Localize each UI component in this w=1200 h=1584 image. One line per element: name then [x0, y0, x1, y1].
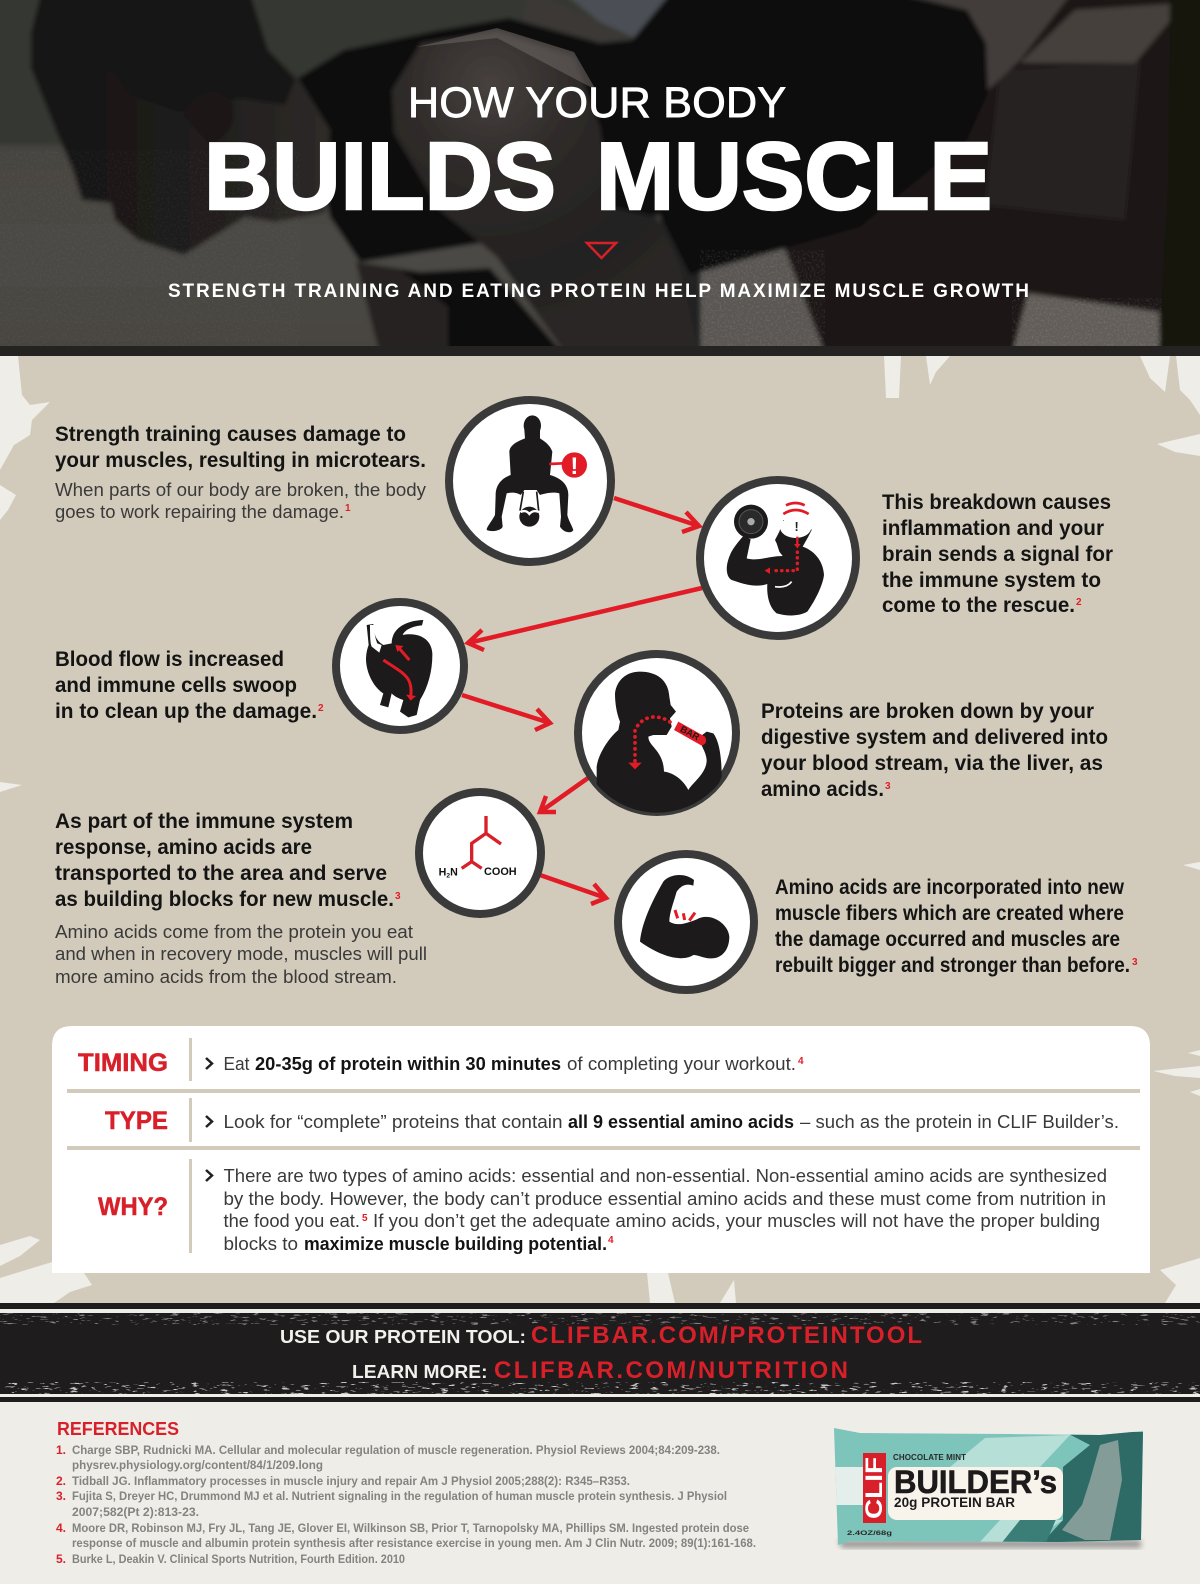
row: type: – such as the protein in CLIF Builder’s. [800, 1111, 1119, 1132]
text block: step 4: Proteins are broken down by your [761, 700, 1094, 723]
row: why: 5 [362, 1213, 368, 1224]
panel: tan paper background [0, 356, 1200, 1313]
references: Charge SBP, Rudnicki MA. Cellular and molecular regulation of muscle regeneration. Physiol Reviews 2004;84:209-238. [72, 1445, 720, 1457]
text block: step 2: brain sends a signal for [882, 543, 1113, 566]
title [204, 79, 992, 230]
row: why: 4 [608, 1235, 614, 1246]
subtitle: STRENGTH TRAINING AND EATING PROTEIN HELP MAXIMIZE MUSCLE GROWTH [168, 281, 1029, 302]
arrow: step 5 to step 6 [540, 875, 606, 904]
icon: squat with kettlebell: ! [570, 453, 578, 480]
icon: person eating protein bar: BAR [679, 724, 701, 742]
references: 5. [56, 1552, 66, 1566]
text block: step 5: transported to the area and serve [55, 862, 387, 885]
row: why: WHY? [98, 1193, 168, 1221]
text block: step 5: more amino acids from the blood stream. [55, 966, 397, 987]
head [31, 54, 333, 256]
text block: step 6: 3 [1132, 957, 1138, 968]
panel: call to action band: CLIFBAR.COM/NUTRITION [494, 1357, 848, 1384]
text block: step 2: 2 [1076, 597, 1082, 608]
row: why: If you don’t get the adequate amino acids, your muscles will not have the proper bulding [373, 1210, 1100, 1231]
icon: flexing arm and brain signal [700, 480, 856, 636]
row: why: maximize muscle building potential. [304, 1233, 607, 1254]
text block: step 5: As part of the immune system [55, 810, 353, 833]
references: 2007;582(Pt 2):813-23. [72, 1507, 199, 1519]
title: HOW YOUR BODY [408, 79, 786, 127]
text block: step 3 [55, 648, 324, 723]
row: why: by the body. However, the body can’t produce essential amino acids and these must come from nutrition in [224, 1188, 1106, 1209]
crate [781, 0, 1173, 346]
references: Tidball JG. Inflammatory processes in muscle injury and repair Am J Physiol 2005;288(2): R345–R353. [72, 1476, 630, 1488]
references: 1. [56, 1443, 66, 1457]
references: 3. [56, 1489, 66, 1503]
references [56, 1419, 756, 1566]
protein bar product: 20g PROTEIN BAR [894, 1495, 1015, 1510]
far arm [363, 257, 560, 346]
text block: step 4: 3 [885, 781, 891, 792]
arm [389, 30, 663, 346]
text block: step 3: 2 [318, 703, 324, 714]
icon: squat with kettlebell [449, 400, 611, 562]
icon: amino acid molecule: COOH [484, 866, 517, 878]
references: response of muscle and albumin protein synthesis after resistance exercise in young men. Am J Clin Nutr. 2009; 89(1):161-168. [72, 1538, 756, 1550]
text block: step 2: This breakdown causes [882, 491, 1111, 514]
panel: call to action band: USE OUR PROTEIN TOOL: [280, 1326, 526, 1347]
text block: step 2 [882, 491, 1113, 617]
thigh [910, 0, 1069, 94]
protein bar product [830, 1425, 1150, 1550]
title: BUILDS [204, 123, 556, 230]
row: timing: 4 [798, 1056, 804, 1067]
text block: step 6 [775, 876, 1138, 977]
row: timing: Eat [224, 1053, 250, 1074]
text block: step 1: goes to work repairing the damage. [55, 501, 344, 522]
text block: step 1: When parts of our body are broken, the body [55, 479, 427, 500]
row: type: all 9 essential amino acids [568, 1111, 794, 1132]
references: physrev.physiology.org/content/84/1/209.long [72, 1460, 323, 1472]
text block: step 3: and immune cells swoop [55, 674, 297, 697]
row: timing [78, 1049, 804, 1077]
text block: step 1: your muscles, resulting in microtears. [55, 449, 426, 472]
text block: step 5: as building blocks for new muscle. [55, 888, 394, 911]
text block: step 5 [55, 810, 427, 987]
arrow: step 4 to step 5 [540, 778, 588, 812]
text block: step 3: in to clean up the damage. [55, 700, 317, 723]
references: Moore DR, Robinson MJ, Fry JL, Tang JE, Glover EI, Wilkinson SB, Prior T, Tarnopolsky MA, Phillips SM. Ingested protein dose [72, 1523, 749, 1535]
text block: step 5: response, amino acids are [55, 836, 312, 859]
text block: step 6: Amino acids are incorporated into new [775, 876, 1125, 899]
panel: call to action band: CLIFBAR.COM/PROTEINTOOL [531, 1322, 922, 1349]
text block: step 5: 3 [395, 891, 401, 902]
row: type: TYPE [105, 1107, 168, 1135]
row: type [105, 1107, 1119, 1135]
icon: person eating protein bar [578, 654, 736, 823]
protein bar product: CLIF [861, 1457, 888, 1519]
text block: step 2: come to the rescue. [882, 594, 1075, 617]
arrow: step 1 to step 2 [614, 498, 699, 532]
text block: step 6: muscle fibers which are created where [775, 902, 1124, 925]
icon: amino acid molecule: H [439, 866, 446, 878]
row: why: blocks to [224, 1233, 298, 1254]
panel: call to action band: LEARN MORE: [352, 1361, 488, 1382]
references: 4. [56, 1521, 66, 1535]
icon: heart [336, 602, 464, 730]
row: why: There are two types of amino acids: essential and non-essential. Non-essential amino acids are synthesized [224, 1165, 1107, 1186]
references: 2. [56, 1474, 66, 1488]
text block: step 4 [761, 700, 1108, 801]
text block: step 1: 1 [345, 503, 351, 514]
text block: step 2: inflammation and your [882, 517, 1104, 540]
text block: step 4: your blood stream, via the liver, as [761, 752, 1103, 775]
text block: step 1 [55, 423, 427, 522]
text block: step 3: Blood flow is increased [55, 648, 284, 671]
text block: step 2: the immune system to [882, 569, 1101, 592]
text block: step 5: Amino acids come from the protein you eat [55, 921, 413, 942]
protein bar product: 2.4OZ/68g [847, 1531, 893, 1537]
row: why [98, 1165, 1107, 1254]
text block: step 6: the damage occurred and muscles are [775, 928, 1120, 951]
text block: step 5: and when in recovery mode, muscles will pull [55, 943, 427, 964]
references: REFERENCES [57, 1419, 179, 1439]
icon: flexing arm and brain signal: ! [795, 520, 799, 534]
row: timing: of completing your workout. [567, 1053, 796, 1074]
arrow: step 2 to step 3 [468, 588, 702, 650]
icon: red down triangle [587, 243, 616, 258]
icon: flexed bicep [618, 854, 754, 990]
icon: amino acid molecule [419, 792, 541, 914]
references: Fujita S, Dreyer HC, Drummond MJ et al. Nutrient signaling in the regulation of human muscle protein synthesis. J Physiol [72, 1491, 727, 1503]
title: MUSCLE [596, 123, 992, 230]
arrow: step 3 to step 4 [462, 695, 550, 730]
row: why: the food you eat. [224, 1210, 360, 1231]
row: timing: 20-35g of protein within 30 minutes [255, 1053, 561, 1074]
icon: amino acid molecule: 2 [446, 872, 450, 879]
text block: step 4: digestive system and delivered into [761, 726, 1108, 749]
panel: call to action band [0, 1303, 1200, 1402]
shorts and shirt [298, 0, 988, 275]
text block: step 1: Strength training causes damage to [55, 423, 406, 446]
header photo of athlete doing push-ups [0, 0, 1200, 366]
protein bar product: CHOCOLATE MINT [893, 1453, 966, 1462]
icon: amino acid molecule: N [450, 866, 458, 878]
text block: step 4: amino acids. [761, 778, 884, 801]
panel: timing, type, why card [52, 1026, 1150, 1273]
references: Burke L, Deakin V. Clinical Sports Nutrition, Fourth Edition. 2010 [72, 1554, 405, 1566]
text block: step 6: rebuilt bigger and stronger than before. [775, 954, 1130, 977]
row: timing: TIMING [78, 1049, 168, 1077]
protein bar product: BUILDER’s [894, 1464, 1057, 1500]
header dark rule [0, 346, 1200, 356]
row: type: Look for “complete” proteins that contain [224, 1111, 562, 1132]
